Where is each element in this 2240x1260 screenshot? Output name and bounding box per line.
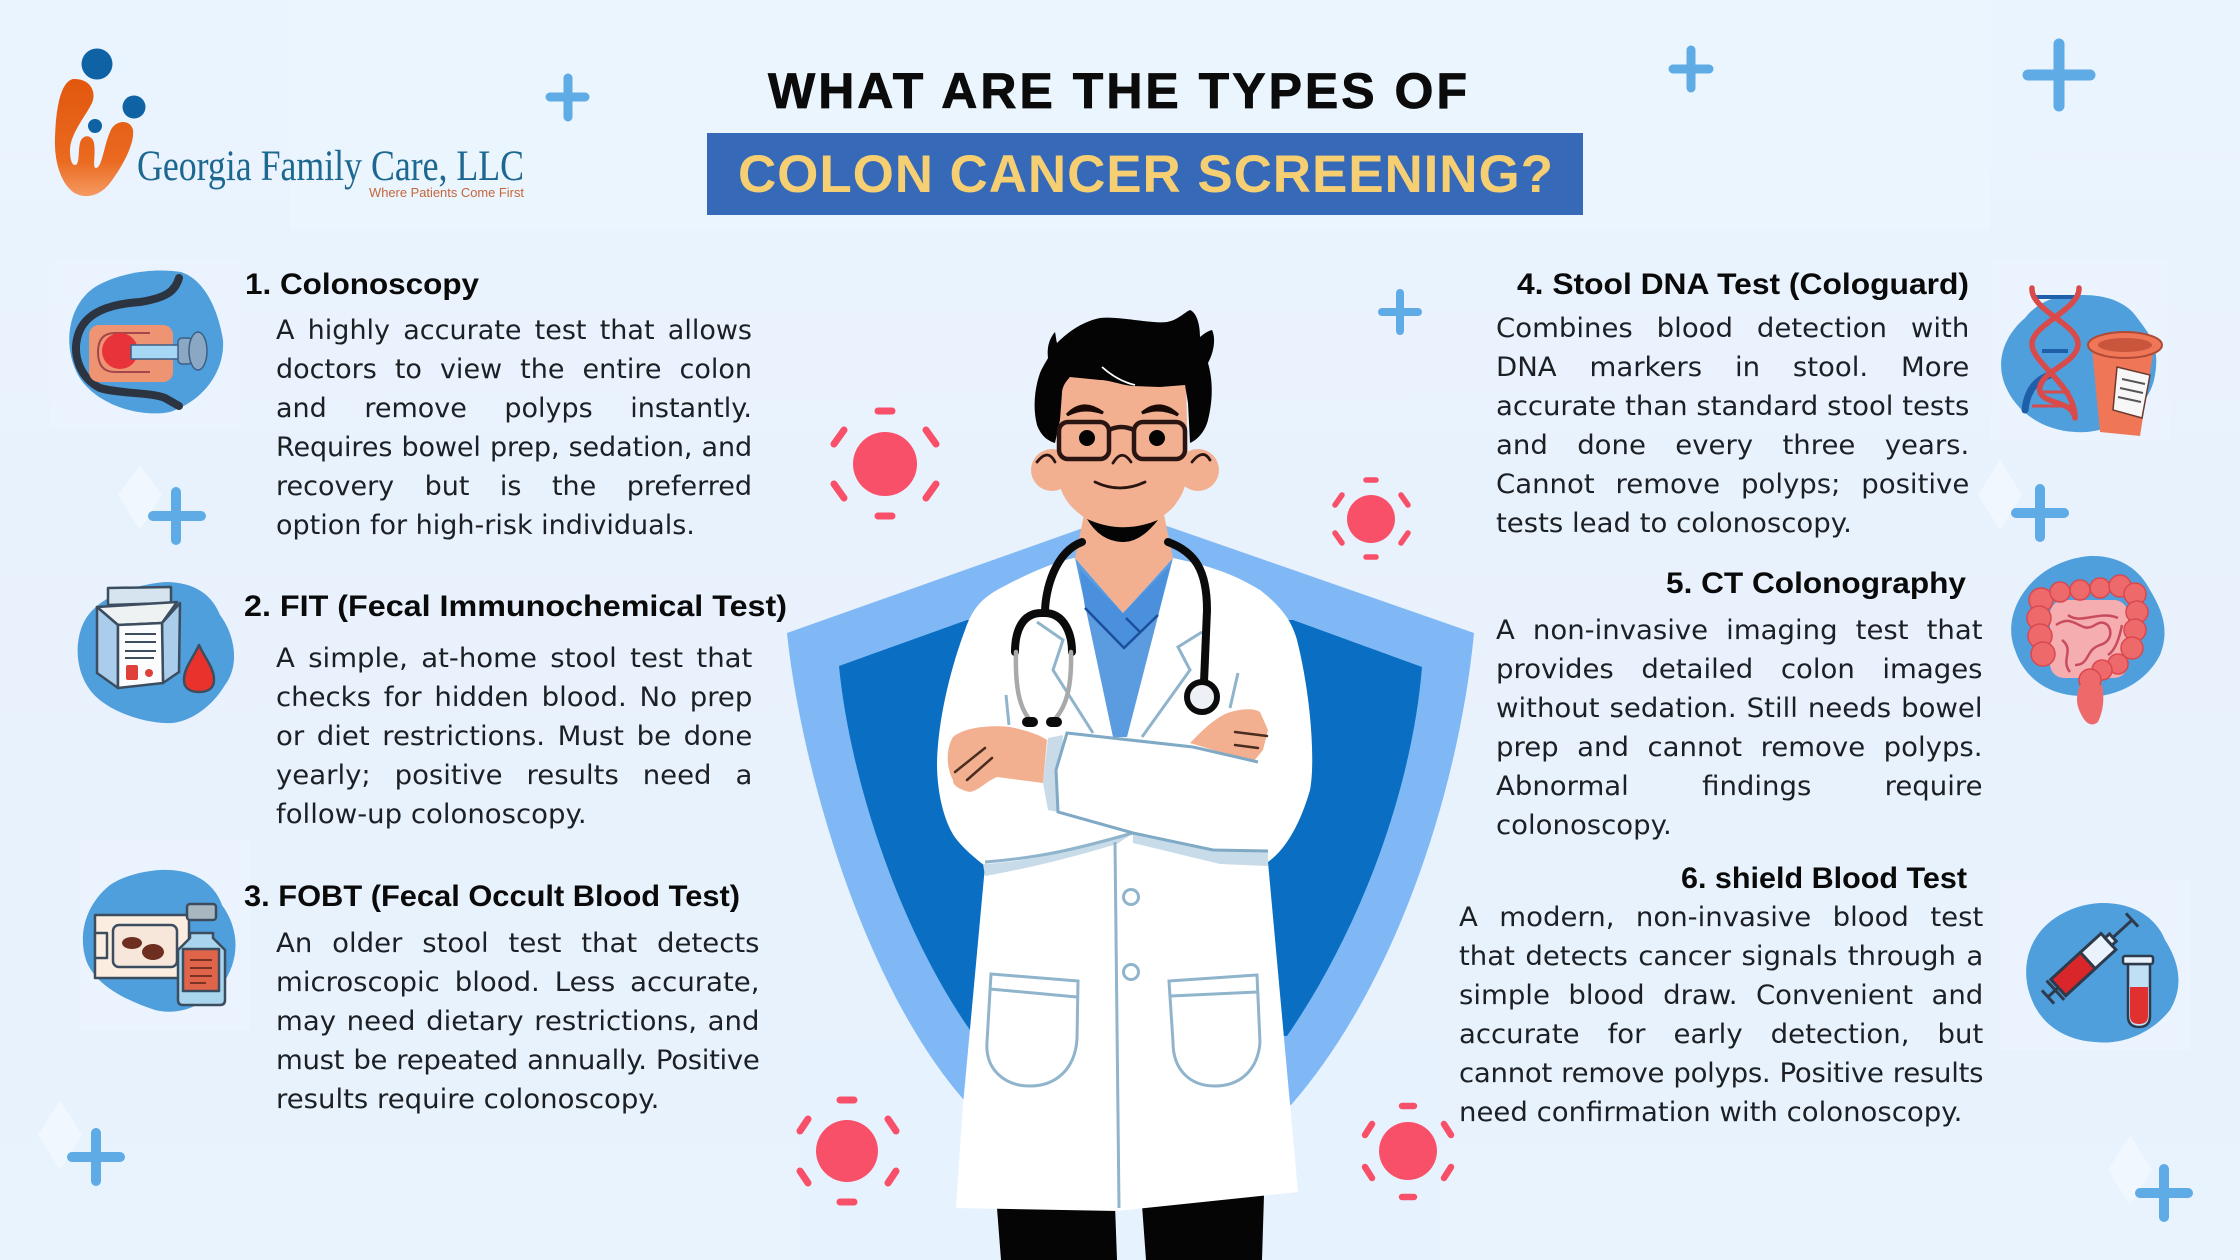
text block: stool DNA: accurate than standard stool tests bbox=[1496, 391, 1969, 422]
text block: CT colonography: provides detailed colon images bbox=[1496, 654, 1983, 685]
text block: colonoscopy: doctors to view the entire colon bbox=[276, 354, 752, 385]
text block: FOBT: results require colonoscopy. bbox=[276, 1084, 659, 1115]
logo mark bbox=[55, 48, 146, 196]
text block: FOBT: An older stool test that detects bbox=[276, 928, 759, 959]
coat details bbox=[985, 622, 1260, 1208]
text block: FIT: follow-up colonoscopy. bbox=[276, 799, 587, 830]
icon: FOBT card and bottle bbox=[83, 870, 235, 1012]
text block: shield blood test: need confirmation with colonoscopy. bbox=[1459, 1097, 1962, 1128]
text block: colonoscopy: and remove polyps instantly. bbox=[276, 393, 752, 424]
icon: DNA and sample cup bbox=[2001, 288, 2162, 436]
lab coat bbox=[937, 558, 1312, 1211]
head bbox=[1031, 310, 1219, 542]
text block: colonoscopy: option for high-risk individuals. bbox=[276, 510, 695, 541]
text block: shield blood test: accurate for early detection, but bbox=[1459, 1019, 1983, 1050]
text block: CT colonography: prep and cannot remove polyps. bbox=[1496, 732, 1983, 763]
text block: FIT: or diet restrictions. Must be done bbox=[276, 721, 752, 752]
neck bbox=[1075, 510, 1173, 613]
text block: stool DNA: DNA markers in stool. More bbox=[1496, 352, 1969, 383]
heading 2: 2. FIT (Fecal Immunochemical Test) bbox=[244, 590, 787, 623]
heading 3: 3. FOBT (Fecal Occult Blood Test) bbox=[244, 880, 740, 913]
hands bbox=[948, 709, 1268, 792]
text block: CT colonography: A non-invasive imaging test that bbox=[1496, 615, 1983, 646]
icon: blood test syringe and tube bbox=[2026, 903, 2178, 1043]
text block: stool DNA: Cannot remove polyps; positive bbox=[1496, 469, 1969, 500]
icon: colonoscopy bbox=[69, 271, 223, 413]
title banner: COLON CANCER SCREENING? bbox=[738, 145, 1553, 204]
text block: shield blood test: A modern, non-invasive blood test bbox=[1459, 902, 1983, 933]
text block: FIT: yearly; positive results need a bbox=[276, 760, 752, 791]
text block: shield blood test: simple blood draw. Convenient and bbox=[1459, 980, 1983, 1011]
text block: CT colonography: without sedation. Still needs bowel bbox=[1496, 693, 1983, 724]
text block: stool DNA: Combines blood detection with bbox=[1496, 313, 1969, 344]
text block: shield blood test bbox=[1459, 902, 1983, 1128]
text block: shield blood test: cannot remove polyps. Positive results bbox=[1459, 1058, 1983, 1089]
text block: stool DNA bbox=[1496, 313, 1969, 539]
heading 4: 4. Stool DNA Test (Cologuard) bbox=[1517, 268, 1969, 301]
trousers bbox=[996, 1195, 1264, 1260]
doctor with shield bbox=[787, 310, 1474, 1260]
logo name: Georgia Family Care, LLC bbox=[137, 143, 524, 190]
text block: colonoscopy: A highly accurate test that allows bbox=[276, 315, 752, 346]
arm shadows bbox=[983, 833, 1268, 876]
text block: shield blood test: that detects cancer signals through a bbox=[1459, 941, 1983, 972]
icon: colon bbox=[2011, 556, 2165, 724]
scrubs bbox=[1075, 558, 1173, 737]
text block: FIT bbox=[276, 643, 752, 830]
shield bbox=[787, 525, 1474, 1105]
text block: colonoscopy: recovery but is the preferred bbox=[276, 471, 752, 502]
text block: FIT: A simple, at-home stool test that bbox=[276, 643, 752, 674]
text block: CT colonography: Abnormal findings require bbox=[1496, 771, 1983, 802]
logo bbox=[55, 48, 524, 200]
text block: colonoscopy: Requires bowel prep, sedation, and bbox=[276, 432, 752, 463]
title line one: WHAT ARE THE TYPES OF bbox=[768, 63, 1467, 119]
logo tagline: Where Patients Come First bbox=[369, 185, 524, 200]
heading 6: 6. shield Blood Test bbox=[1681, 862, 1967, 895]
heading 1: 1. Colonoscopy bbox=[245, 268, 479, 301]
stethoscope bbox=[1015, 542, 1217, 722]
text block: stool DNA: tests lead to colonoscopy. bbox=[1496, 508, 1852, 539]
text block: FOBT: may need dietary restrictions, and bbox=[276, 1006, 759, 1037]
text block: colonoscopy bbox=[276, 315, 752, 541]
title banner bbox=[707, 133, 1583, 215]
crossed sleeve bbox=[1043, 733, 1312, 851]
heading 5: 5. CT Colonography bbox=[1666, 567, 1966, 600]
text block: FOBT: microscopic blood. Less accurate, bbox=[276, 967, 759, 998]
text block: CT colonography: colonoscopy. bbox=[1496, 810, 1672, 841]
text block: FIT: checks for hidden blood. No prep bbox=[276, 682, 752, 713]
text block: FOBT: must be repeated annually. Positive bbox=[276, 1045, 759, 1076]
text block: FOBT bbox=[276, 928, 759, 1115]
icon: FIT kit bbox=[78, 582, 234, 723]
red virus particles bbox=[800, 411, 1451, 1202]
text block: CT colonography bbox=[1496, 615, 1983, 841]
text block: stool DNA: and done every three years. bbox=[1496, 430, 1969, 461]
